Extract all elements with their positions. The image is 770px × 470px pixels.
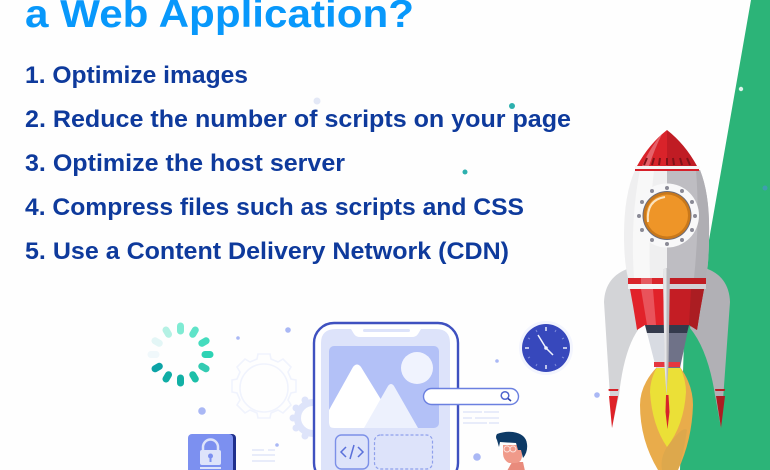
- flame: [640, 367, 693, 470]
- green diagonal panel: [680, 0, 770, 470]
- optimization tips list: 5. Use a Content Delivery Network (CDN): [25, 238, 509, 265]
- left fin: [604, 268, 638, 428]
- nose cone: [635, 130, 700, 171]
- text lines under search bar: [463, 412, 499, 423]
- person illustration: [496, 432, 527, 470]
- dashed box: [374, 435, 432, 469]
- optimization tips list: 2. Reduce the number of scripts on your page: [25, 106, 571, 133]
- phone mockup: [314, 323, 458, 470]
- code tag box: [336, 435, 368, 469]
- image placeholder: [329, 346, 439, 428]
- optimization tips list: 3. Optimize the host server: [25, 150, 345, 177]
- rocket: [604, 130, 730, 470]
- nozzle: [645, 325, 689, 368]
- center needle: [663, 268, 670, 429]
- porthole: [635, 184, 699, 248]
- icon: clock: [519, 321, 573, 375]
- right fin: [690, 268, 730, 428]
- decorative dots: [198, 87, 767, 461]
- search bar: [424, 388, 518, 404]
- optimization tips list: 4. Compress files such as scripts and CSS: [25, 194, 524, 221]
- optimization tips list: 1. Optimize images: [25, 62, 248, 89]
- icon: outline gear: [232, 354, 296, 418]
- text lines near lock: [252, 450, 275, 461]
- icon: lock book: [188, 434, 236, 470]
- body: [624, 170, 667, 285]
- icon: loading spinner: [151, 326, 210, 383]
- icon: filled gear behind phone: [290, 396, 328, 440]
- red bands: [628, 278, 706, 330]
- optimization tips list: [25, 62, 571, 265]
